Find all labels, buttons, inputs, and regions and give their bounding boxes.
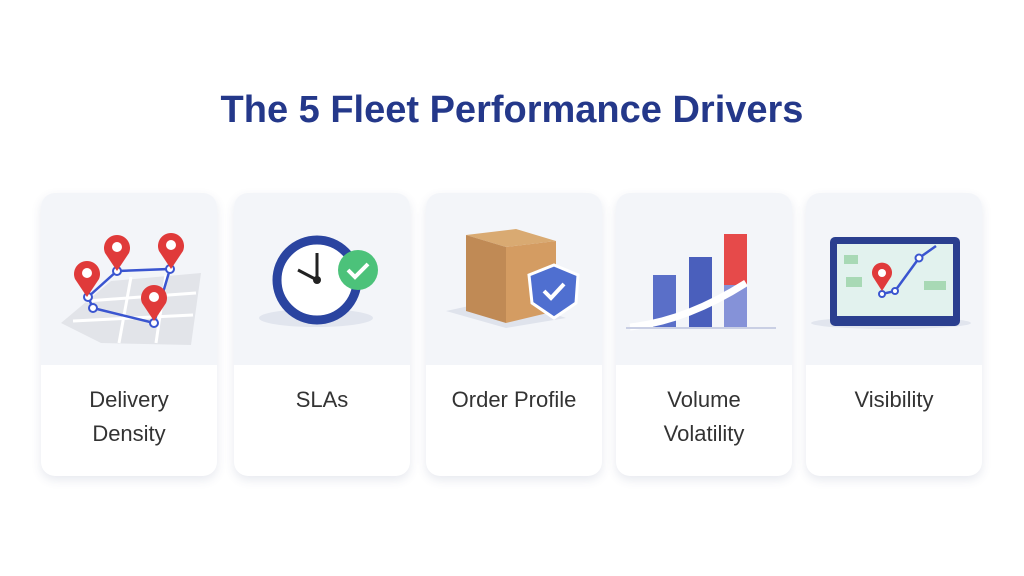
label <box>664 387 744 446</box>
icon: tablet map <box>811 237 971 329</box>
label: Visibility <box>854 387 934 412</box>
label: Volume <box>667 387 741 412</box>
icon: box with shield <box>446 229 580 328</box>
card: visibility <box>806 193 982 476</box>
icon: bar chart <box>626 234 776 330</box>
label: Density <box>92 421 166 446</box>
icon: map pins route <box>62 233 201 345</box>
label: Delivery <box>89 387 169 412</box>
card: SLAs <box>234 193 410 476</box>
card: volume volatility <box>616 193 792 476</box>
icon: clock with check <box>259 236 378 327</box>
label: Volatility <box>664 421 744 446</box>
card: order profile <box>426 193 602 476</box>
label: SLAs <box>296 387 348 412</box>
card: delivery density <box>41 193 217 476</box>
title: The 5 Fleet Performance Drivers <box>221 89 803 131</box>
label: Order Profile <box>452 387 576 412</box>
label <box>89 387 169 446</box>
